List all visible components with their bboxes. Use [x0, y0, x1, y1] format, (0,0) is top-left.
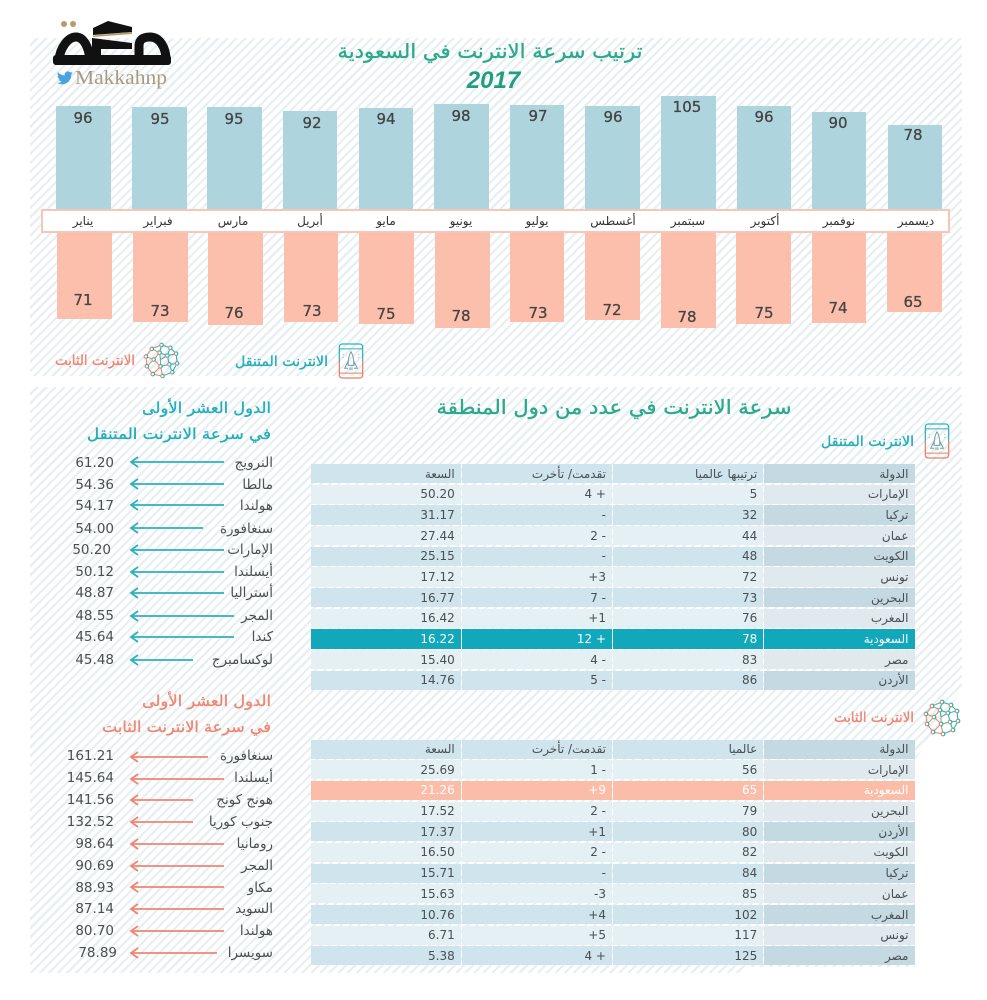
- table: fixed internet speed in the region: 102: [734, 908, 757, 922]
- table: mobile internet speed in the region: ترتيبها عالميا: [695, 467, 757, 481]
- month group: April: أبريل: [297, 213, 323, 229]
- month group: November: 90: [828, 114, 848, 132]
- section label: mobile internet: [821, 424, 949, 458]
- list: top ten mobile: 48.87: [75, 585, 114, 601]
- month group: April: 92: [302, 114, 322, 132]
- table: mobile internet speed in the region: 78: [742, 632, 757, 646]
- list: top ten mobile: مالطا: [242, 477, 273, 493]
- table: fixed internet speed in the region: 84: [742, 866, 757, 880]
- month group: December: ديسمبر: [897, 214, 934, 229]
- table: fixed internet speed in the region: 4 +: [584, 949, 606, 963]
- section label: fixed internet: [834, 700, 960, 736]
- table: mobile internet speed in the region: الدولة: [879, 467, 908, 481]
- list: top ten fixed: 145.64: [67, 770, 114, 786]
- table: mobile internet speed in the region: 4 +: [584, 487, 606, 501]
- list: top ten fixed: أيسلندا: [234, 768, 273, 786]
- list: top ten fixed: سنغافورة: [220, 748, 273, 764]
- list: top ten fixed: 98.64: [75, 836, 114, 852]
- month group: November: نوفمبر: [822, 214, 855, 229]
- table: mobile internet speed in the region: 25.15: [420, 549, 455, 563]
- table: mobile internet speed in the region: 31.17: [420, 508, 455, 522]
- month group: November: 74: [828, 299, 848, 317]
- table: fixed internet speed in the region: 17.52: [420, 804, 455, 818]
- table: mobile internet speed in the region: 16.22: [420, 632, 455, 646]
- table: fixed internet speed in the region: 5.38: [428, 949, 455, 963]
- table: mobile internet speed in the region: 32: [742, 508, 757, 522]
- list: top ten fixed: 161.21: [67, 748, 114, 764]
- table: mobile internet speed in the region: +1: [588, 611, 606, 625]
- table: fixed internet speed in the region: الإمارات: [868, 763, 908, 777]
- table: mobile internet speed in the region: 5 -: [590, 673, 606, 687]
- table: mobile internet speed in the region: 48: [742, 549, 757, 563]
- list: top ten fixed: 90.69: [75, 858, 114, 874]
- table: mobile internet speed in the region: 12 +: [577, 632, 606, 646]
- table: fixed internet speed in the region: 16.50: [420, 845, 455, 859]
- month group: January: 71: [73, 291, 93, 309]
- table: mobile internet speed in the region: السعودية: [864, 632, 908, 646]
- table: fixed internet speed in the region: الأردن: [878, 825, 908, 839]
- table: fixed internet speed in the region: 2 -: [590, 804, 606, 818]
- table: fixed internet speed in the region: 15.71: [420, 866, 455, 880]
- list: top ten fixed: 78.89: [78, 945, 117, 961]
- table: mobile internet speed in the region: 44: [742, 529, 757, 543]
- table: fixed internet speed in the region: تركيا: [886, 866, 908, 880]
- list: top ten fixed: 88.93: [75, 880, 114, 896]
- table: fixed internet speed in the region: 6.71: [428, 928, 455, 942]
- list: top ten mobile: 45.48: [75, 652, 114, 668]
- table: mobile internet speed in the region: -: [602, 508, 606, 522]
- list: top ten fixed: مكاو: [247, 880, 273, 896]
- table: fixed internet speed in the region: 25.69: [420, 763, 455, 777]
- table: mobile internet speed in the region: 73: [742, 591, 757, 605]
- table: fixed internet speed in the region: -: [602, 866, 606, 880]
- table: fixed internet speed in the region: عالميا: [729, 742, 757, 756]
- table: mobile internet speed in the region: الكويت: [874, 549, 908, 563]
- list: top ten mobile: 50.20: [72, 542, 111, 558]
- table: mobile internet speed in the region: 76: [742, 611, 757, 625]
- panel: regional comparison and top ten lists: [30, 387, 962, 973]
- legend: fixed internet: الانترنت الثابت: [55, 353, 135, 369]
- month group: May: مايو: [375, 214, 396, 229]
- month group: January: يناير: [72, 214, 93, 229]
- month group: September: سبتمبر: [670, 214, 705, 229]
- twitter icon: [57, 71, 73, 84]
- month group: October: [736, 106, 791, 324]
- table: mobile internet speed in the region: 16.42: [420, 611, 455, 625]
- month group: December: 78: [903, 126, 923, 144]
- month group: March: 95: [224, 110, 244, 128]
- table: mobile internet speed in the region: 50.20: [420, 487, 455, 501]
- table: fixed internet speed in the region: السعودية: [864, 783, 908, 797]
- heading: top ten fixed: الدول العشر الأولى: [142, 691, 271, 710]
- table: fixed internet speed in the region: +5: [588, 928, 606, 942]
- list: top ten mobile: سنغافورة: [220, 521, 273, 537]
- list: top ten mobile: أيسلندا: [234, 562, 273, 580]
- table: fixed internet speed in the region: مصر: [885, 949, 908, 963]
- table: fixed internet speed in the region: 65: [742, 783, 757, 797]
- table: fixed internet speed in the region: 80: [742, 825, 757, 839]
- table: fixed internet speed in the region: +1: [588, 825, 606, 839]
- month group: September: 78: [677, 308, 697, 326]
- month group: August: 96: [603, 108, 623, 126]
- month group: February: 95: [150, 110, 170, 128]
- legend: mobile internet: [235, 344, 363, 378]
- table: fixed internet speed in the region: السعة: [425, 742, 455, 756]
- list: top ten mobile: 54.36: [75, 477, 114, 493]
- month group: February: فبراير: [142, 214, 173, 229]
- table: fixed internet speed in the region: 1 -: [590, 763, 606, 777]
- table: mobile internet speed in the region: -: [602, 549, 606, 563]
- month group: May: 75: [376, 305, 396, 323]
- list: top ten mobile: لوكسامبرج: [212, 652, 273, 668]
- month group: August: أغسطس: [590, 213, 636, 229]
- month group: March: 76: [224, 304, 244, 322]
- list: top ten fixed: 80.70: [75, 923, 114, 939]
- month group: April: [283, 111, 338, 322]
- table: mobile internet speed in the region: 86: [742, 673, 757, 687]
- month group: October: 96: [754, 108, 774, 126]
- heading: top ten mobile: الدول العشر الأولى: [142, 398, 271, 417]
- table: fixed internet speed in the region: عمان: [882, 887, 908, 901]
- table: mobile internet speed in the region: عمان: [882, 529, 908, 543]
- heading: top ten fixed: [102, 691, 271, 737]
- table: fixed internet speed in the region: -3: [594, 887, 606, 901]
- month group: July: يوليو: [524, 214, 549, 229]
- month group: December: [887, 125, 942, 312]
- list: top ten mobile: 61.20: [75, 455, 114, 471]
- table: mobile internet speed in the region: 72: [742, 570, 757, 584]
- table: mobile internet speed in the region: +3: [588, 570, 606, 584]
- list: top ten fixed: المجر: [240, 858, 273, 874]
- month group: December: 65: [903, 293, 923, 311]
- table: fixed internet speed in the region: 10.76: [420, 908, 455, 922]
- table: mobile internet speed in the region: الإمارات: [868, 487, 908, 501]
- table: fixed internet speed in the region: البحرين: [871, 804, 908, 818]
- table: mobile internet speed in the region: تركيا: [886, 508, 908, 522]
- table: mobile internet speed in the region: تونس: [880, 570, 908, 584]
- list: top ten fixed: رومانيا: [237, 836, 273, 852]
- table: fixed internet speed in the region: تونس: [880, 928, 908, 942]
- table: mobile internet speed in the region: مصر: [885, 653, 908, 667]
- list: top ten mobile: أستراليا: [230, 583, 273, 601]
- table: mobile internet speed in the region: 15.40: [420, 653, 455, 667]
- month group: June: 78: [451, 307, 471, 325]
- table: mobile internet speed in the region: 16.77: [420, 591, 455, 605]
- table: fixed internet speed in the region: 17.37: [420, 825, 455, 839]
- list: top ten fixed: السويد: [235, 901, 273, 917]
- table: fixed internet speed in the region: المغرب: [871, 908, 908, 922]
- month group: August: [585, 106, 640, 320]
- month group: May: 94: [376, 110, 396, 128]
- table: fixed internet speed in the region: +4: [588, 908, 606, 922]
- month group: June: [434, 104, 490, 328]
- table: fixed internet speed in the region: الكويت: [874, 845, 908, 859]
- table: mobile internet speed in the region: 17.12: [420, 570, 455, 584]
- table: mobile internet speed in the region: السعة: [425, 467, 455, 481]
- list: top ten mobile: كندا: [252, 629, 274, 645]
- list: top ten mobile: 48.55: [75, 608, 114, 624]
- table: fixed internet speed in the region: [311, 740, 915, 965]
- list: top ten fixed: سويسرا: [228, 945, 273, 961]
- section label: mobile internet: الانترنت المتنقل: [821, 434, 914, 450]
- year: 2017: [466, 67, 522, 94]
- table: fixed internet speed in the region: 125: [734, 949, 757, 963]
- table: fixed internet speed in the region: 15.63: [420, 887, 455, 901]
- table: mobile internet speed in the region: 27.44: [420, 529, 455, 543]
- table: mobile internet speed in the region: تقدمت/ تأخرت: [532, 467, 606, 481]
- table: fixed internet speed in the region: 117: [734, 928, 757, 942]
- table: mobile internet speed in the region: البحرين: [871, 591, 908, 605]
- table: mobile internet speed in the region: المغرب: [871, 611, 908, 625]
- logo mark: domes, base bar and Kaaba: [53, 21, 171, 65]
- list: top ten mobile: 54.00: [75, 521, 114, 537]
- list: top ten fixed: 132.52: [67, 814, 114, 830]
- list: top ten fixed: جنوب كوريا: [209, 814, 273, 830]
- month group: November: [812, 112, 866, 323]
- month group: March: [207, 107, 263, 325]
- legend: mobile internet: الانترنت المتنقل: [235, 354, 328, 370]
- list: top ten fixed: هولندا: [240, 923, 273, 939]
- month group: January: 96: [73, 109, 93, 127]
- month group: October: أكتوبر: [750, 213, 779, 229]
- list: top ten mobile: 50.12: [75, 564, 114, 580]
- title: ترتيب سرعة الانترنت في السعودية: [338, 39, 642, 64]
- list: top ten fixed: 141.56: [67, 792, 114, 808]
- twitter handle: Makkahnp: [75, 67, 167, 89]
- heading: top ten fixed: في سرعة الانترنت الثابت: [102, 718, 271, 737]
- table: mobile internet speed in the region: 2 -: [590, 529, 606, 543]
- table: fixed internet speed in the region: 82: [742, 845, 757, 859]
- table: fixed internet speed in the region: تقدمت/ تأخرت: [532, 742, 606, 756]
- list: top ten fixed: 87.14: [75, 901, 114, 917]
- month group: June: يونيو: [449, 214, 472, 229]
- list: top ten mobile: هولندا: [240, 498, 273, 514]
- list: top ten mobile: الإمارات: [227, 542, 273, 558]
- list: top ten mobile: [72, 455, 274, 668]
- list: top ten fixed: هونج كونج: [216, 792, 273, 808]
- month group: May: [359, 108, 414, 324]
- month group: July: 73: [528, 304, 548, 322]
- table: mobile internet speed in the region: 14.76: [420, 673, 455, 687]
- month group: September: 105: [673, 98, 701, 116]
- table: mobile internet speed in the region: 7 -: [590, 591, 606, 605]
- month group: July: 97: [528, 107, 548, 125]
- table: fixed internet speed in the region: 21.26: [420, 783, 455, 797]
- month group: January: [56, 106, 112, 319]
- subtitle: سرعة الانترنت في عدد من دول المنطقة: [436, 395, 792, 420]
- section label: fixed internet: الانترنت الثابت: [834, 710, 914, 726]
- month group: June: 98: [451, 107, 471, 125]
- table: mobile internet speed in the region: 5: [750, 487, 757, 501]
- month group: July: [510, 105, 564, 322]
- table: mobile internet speed in the region: الأردن: [878, 673, 908, 687]
- month group: October: 75: [754, 304, 774, 322]
- month group: September: [661, 96, 716, 328]
- month group: March: مارس: [218, 214, 248, 229]
- table: fixed internet speed in the region: 56: [742, 763, 757, 777]
- table: mobile internet speed in the region: [311, 464, 915, 690]
- table: fixed internet speed in the region: +9: [588, 783, 606, 797]
- list: top ten mobile: المجر: [240, 608, 273, 624]
- table: fixed internet speed in the region: 79: [742, 804, 757, 818]
- table: fixed internet speed in the region: 2 -: [590, 845, 606, 859]
- table: fixed internet speed in the region: 85: [742, 887, 757, 901]
- table: mobile internet speed in the region: 4 -: [590, 653, 606, 667]
- legend: fixed internet: [55, 343, 179, 378]
- month group: August: 72: [602, 301, 622, 319]
- panel: monthly ranking of internet speed in Saudi Arabia 2017: [30, 38, 962, 376]
- list: top ten mobile: 45.64: [75, 629, 114, 645]
- heading: top ten mobile: [87, 398, 271, 444]
- logo: Makkah newspaper: [53, 21, 171, 89]
- heading: top ten mobile: في سرعة الانترنت المتنقل: [87, 425, 271, 444]
- logo word: مكة: [105, 57, 121, 67]
- month group: April: 73: [302, 302, 322, 320]
- month label band: [42, 210, 949, 232]
- month group: February: [132, 107, 188, 322]
- list: top ten fixed: [67, 748, 273, 961]
- month group: February: 73: [150, 302, 170, 320]
- list: top ten mobile: 54.17: [75, 498, 114, 514]
- table: mobile internet speed in the region: 83: [742, 653, 757, 667]
- table: fixed internet speed in the region: الدولة: [879, 742, 908, 756]
- list: top ten mobile: النرويج: [235, 455, 273, 471]
